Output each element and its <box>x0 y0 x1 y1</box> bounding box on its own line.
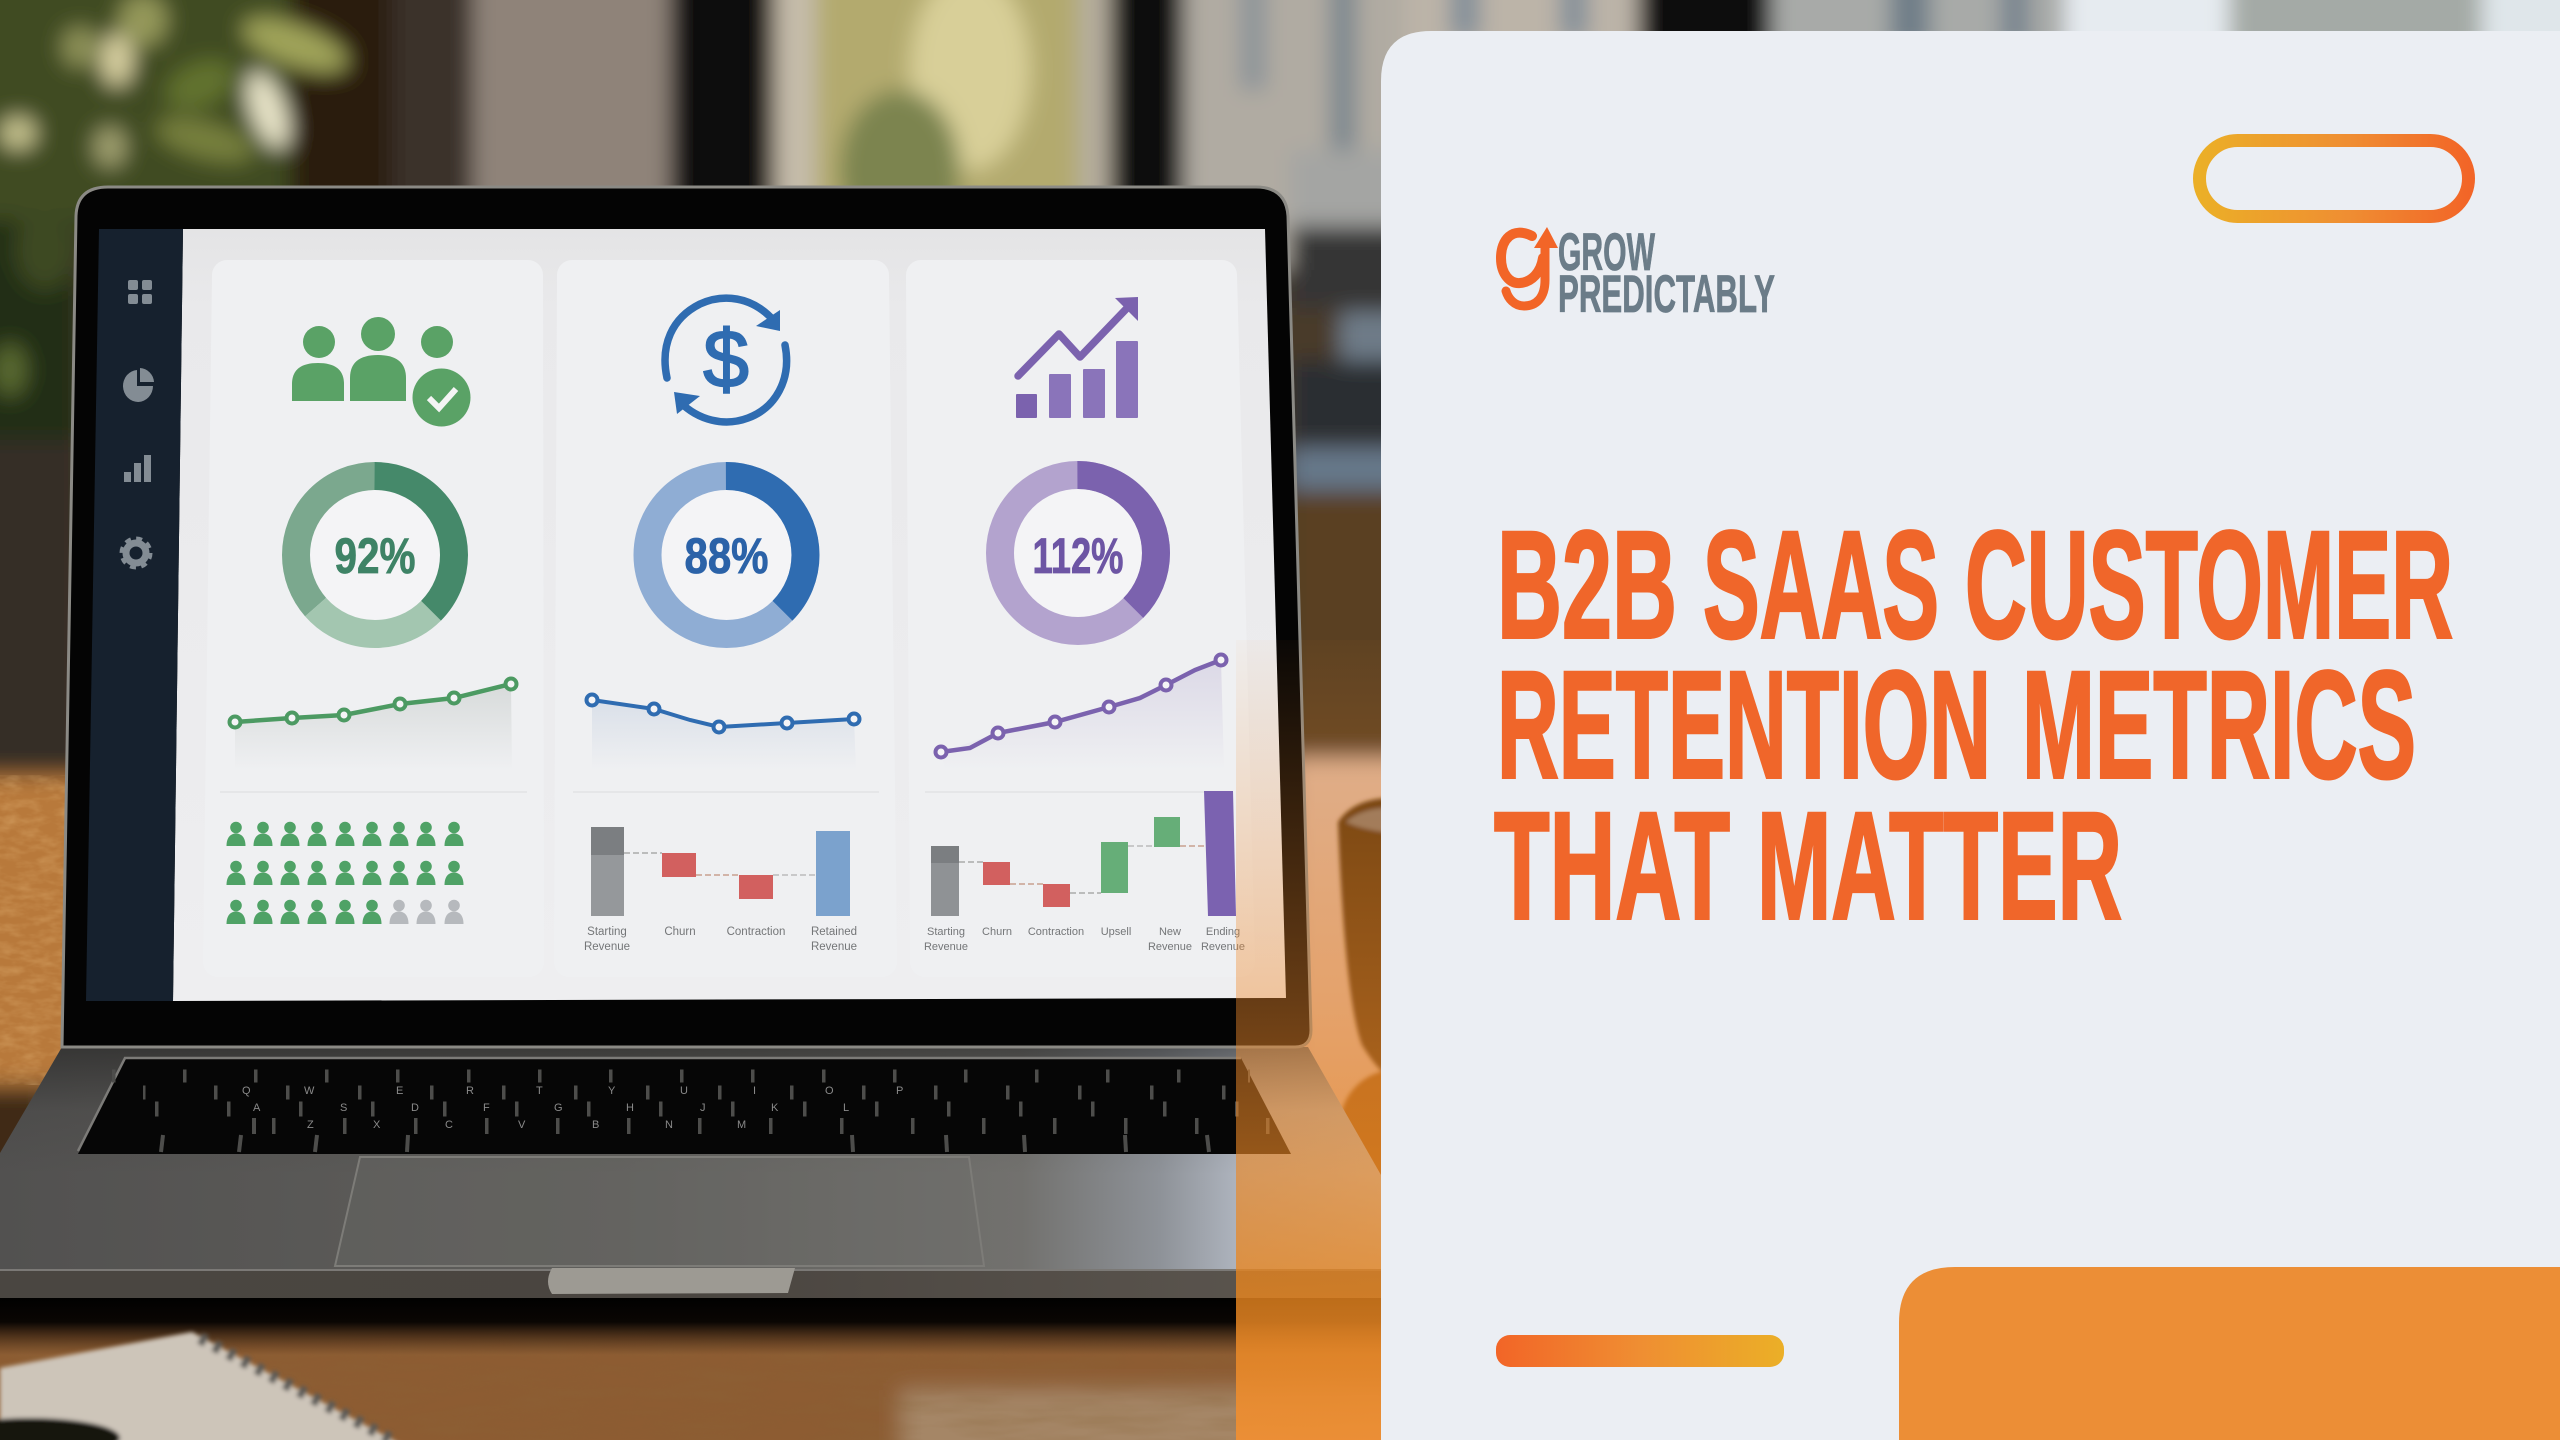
screen <box>173 229 1286 1001</box>
waterfall chart: net revenue: Starting <box>927 926 965 938</box>
keyboard: ZXCVBNM <box>307 1119 746 1131</box>
waterfall chart: net revenue: Revenue <box>1148 941 1192 953</box>
logo: Grow Predictably <box>1501 223 1775 324</box>
laptop base shadow on desk <box>0 1295 1381 1355</box>
waterfall chart: net revenue: Upsell <box>1101 926 1131 938</box>
waterfall chart: net revenue: Churn <box>982 926 1012 938</box>
waterfall chart: retained revenue: Contraction <box>727 926 785 938</box>
accent gradient bar <box>1496 1335 1784 1367</box>
notebook on desk <box>0 1332 402 1440</box>
front edge <box>0 1270 1381 1298</box>
waterfall chart: net revenue: New <box>1159 926 1181 938</box>
waterfall chart: net revenue <box>924 791 1245 953</box>
title: THAT <box>1494 780 1730 952</box>
waterfall chart: retained revenue <box>584 827 857 953</box>
title: MATTER <box>1757 780 2122 952</box>
keyboard deck <box>0 1047 1381 1272</box>
orange gradient strip <box>1236 640 1381 1440</box>
icon: g with arrow <box>1501 227 1558 306</box>
waterfall chart: retained revenue: Churn <box>664 926 696 938</box>
waterfall chart: net revenue: Revenue <box>924 941 968 953</box>
icon: dashboard grid <box>128 280 152 304</box>
panel: revenue retention <box>569 275 882 962</box>
donut chart: 112%: 112% <box>1032 528 1124 584</box>
title: RETENTION <box>1497 640 1991 810</box>
donut chart: 112% <box>1000 475 1156 631</box>
wordmark: GROW <box>1558 223 1655 282</box>
decorative pill outline <box>2200 140 2468 216</box>
plant leaves <box>101 34 133 86</box>
waterfall chart: net revenue: Contraction <box>1028 926 1084 938</box>
waterfall chart: retained revenue: Retained <box>811 926 857 938</box>
icon: pie chart <box>123 368 154 402</box>
panel: logo retention <box>218 275 529 962</box>
waterfall chart: retained revenue: Revenue <box>811 941 857 953</box>
wordmark <box>1558 223 1775 324</box>
line chart: purple rising <box>936 654 1226 770</box>
sidebar <box>86 229 183 1001</box>
keyboard: ASDFGHJKL <box>253 1102 849 1114</box>
icon: rising bars with arrow <box>1016 297 1138 418</box>
waterfall chart: net revenue: Ending <box>1206 926 1240 938</box>
icon: customers with check <box>292 317 474 430</box>
donut chart: 88%: 88% <box>684 528 768 584</box>
laptop lid <box>62 187 1311 1047</box>
room right of the laptop <box>1290 150 1590 228</box>
title: B2B <box>1497 500 1677 670</box>
donut chart: 88% <box>648 476 806 634</box>
title: SAAS <box>1703 500 1939 670</box>
trackpad <box>335 1157 984 1266</box>
panel: net revenue retention <box>921 275 1245 962</box>
icon: dollar cycle <box>665 298 787 422</box>
keyboard: QWERTYUIOP <box>242 1085 903 1097</box>
icon: gear <box>122 538 150 568</box>
coffee mug <box>1338 798 1450 1180</box>
pictogram grid: customers <box>226 822 464 924</box>
keyboard <box>78 1058 1291 1154</box>
orange corner block <box>1899 1267 2560 1440</box>
donut chart: 92%: 92% <box>334 528 416 584</box>
icon: dollar cycle: $ <box>703 314 749 405</box>
front notch <box>548 1268 795 1294</box>
line chart: blue dipping <box>586 694 860 770</box>
donut chart: 92% <box>296 476 454 634</box>
icon: bars <box>124 455 151 482</box>
waterfall chart: retained revenue: Revenue <box>584 941 630 953</box>
line chart: green rising <box>230 678 516 770</box>
title <box>1494 500 2453 952</box>
waterfall chart: net revenue: Revenue <box>1201 941 1245 953</box>
panel: title background <box>1381 31 2560 1440</box>
laptop <box>0 187 1381 1355</box>
wordmark: PREDICTABLY <box>1558 265 1775 324</box>
waterfall chart: retained revenue: Starting <box>587 926 627 938</box>
